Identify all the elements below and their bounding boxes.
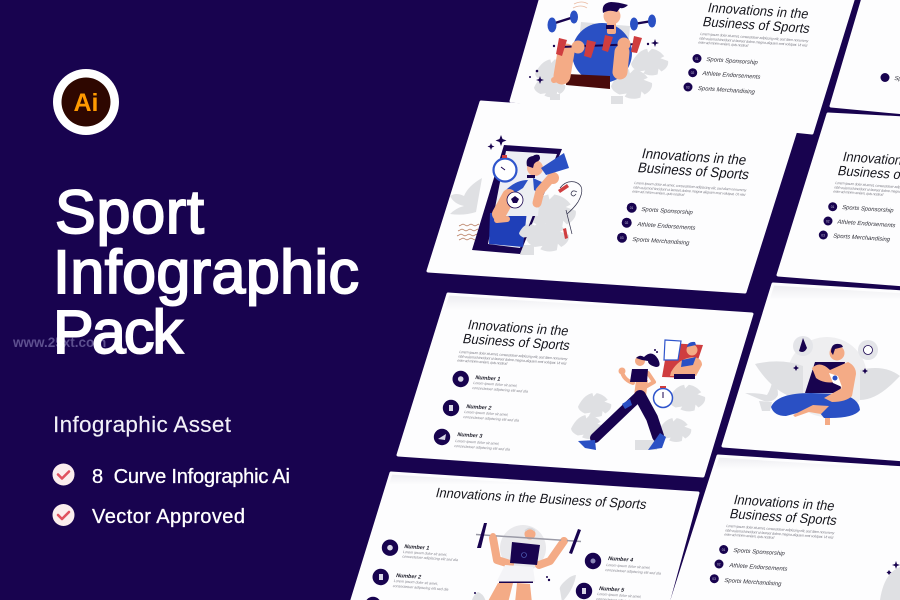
item: number 1: consectetuer adipiscing elit sed dia [472,386,529,394]
heading [728,492,839,528]
list: 01 [630,206,633,210]
body text: nibh euismod tincidunt ut laoreet dolore magna aliquam erat volutpat. Ut wisi [725,529,834,540]
item: number 5: Number 5 [598,586,625,594]
body text: enim ad minim veniam, quis nostrud [724,533,775,540]
item: number 4: consectetuer adipiscing elit sed dia [605,568,662,576]
illustration: running woman [571,340,705,450]
body text: enim ad minim veniam, quis nostrud [457,359,508,366]
heading: Innovations in the [466,317,570,339]
body text: enim ad minim veniam, quis nostrud [698,41,749,48]
list: Athlete Endorsements [728,563,788,573]
heading [836,149,900,185]
body text: enim ad minim veniam, quis nostrud [632,190,685,197]
body text: nibh euismod tincidunt ut laoreet dolore magna aliquam erat volutpat. Ut wisi [699,37,808,48]
list: Sports Merchandising [697,86,756,96]
list [819,202,896,243]
list: Sports Merchandising [631,237,690,247]
list: Sports Merchandising [832,234,891,243]
list: Athlete Endorsements [636,222,696,232]
list: Athlete Endorsements [836,220,896,229]
item: number 1: consectetuer adipiscing elit sed dia [402,555,459,562]
panel: slide 6 seated man [723,284,900,460]
list: 03 [712,577,716,581]
title [53,178,359,366]
panel: left promo column [12,69,359,528]
list [617,203,696,247]
item: number 5 [576,583,653,600]
illustration: man with dumbbells [529,2,668,104]
item: number 1 [382,540,459,562]
item: number 2 [443,400,520,423]
list [710,545,788,588]
panel: slide 2 phone and megaphone [428,102,798,292]
list: 01 [722,548,725,552]
icon: Adobe Illustrator badge: Ai [74,89,98,117]
list [684,54,761,96]
list: Sports Sponsorship [841,205,895,214]
item: number 2: Lorem ipsum dolor sit amet, [464,410,509,417]
item: number 3 [365,597,381,600]
item: number 3: Lorem ipsum dolor sit amet, [455,439,500,446]
body text [724,524,835,540]
heading: Business of Sports [701,14,812,36]
heading [461,317,572,353]
illustration: coach in phone [450,135,582,255]
heading [636,145,751,182]
body text: Lorem ipsum dolor sit amet, consectetuer adipiscing elit, sed diam nonummy [700,32,809,43]
panel: slide 4 barbell lifter [351,473,698,600]
illustration: barbell lifter [472,523,581,600]
item: number 1: Number 1 [474,375,501,383]
item: number 2: consectetuer adipiscing elit sed dia [392,584,450,592]
body text [698,32,809,48]
item: number 2: Number 2 [395,573,422,581]
illustration: corner leaf [880,561,900,600]
heading: Innovations in the [732,492,836,514]
panel: top right slide [831,0,900,113]
watermark: www.25xt.com [12,335,106,350]
list: 02 [717,562,721,566]
list: 03 [620,236,624,240]
list: 03 [821,234,825,238]
body text [833,181,900,197]
icon: Adobe Illustrator badge [53,69,119,135]
panel: slide 7 bottom right [671,456,900,600]
list: 01 [695,57,699,61]
item: number 4: Number 4 [607,556,635,564]
list: 01 [831,205,834,209]
illustration: man with arm band [745,336,900,425]
body text: Lorem ipsum dolor sit amet, consectetuer adipiscing elit, sed diam nonummy [634,181,747,192]
list: Sports Sponsorship [640,207,694,216]
item: number 3 [434,429,511,452]
panel: slide 5 right text [778,114,900,285]
body text: Lorem ipsum dolor sit amet, consectetuer adipiscing elit, sed diam nonummy [726,524,835,535]
title: Pack [53,298,184,366]
heading [701,0,812,36]
feature: vector approved: Vector Approved [92,506,245,528]
item: number 1: Lorem ipsum dolor sit amet, [402,550,448,557]
list: 02 [691,71,694,75]
panel: slide 3 runner [398,294,752,476]
subtitle: Infographic Asset [53,412,232,437]
item: number 4 [585,553,662,576]
body text: enim ad minim veniam, quis nostrud [833,190,884,197]
heading: Business of Sports [728,506,839,528]
list: 02 [826,220,830,224]
panel: slide 1 weightlifting dumbbells [511,0,854,133]
list: 03 [686,86,690,90]
heading: Innovations in the [640,145,749,168]
item: number 3: Number 3 [456,432,483,440]
body text [457,350,568,366]
item: number 2: Lorem ipsum dolor sit amet, [393,579,439,586]
item: number 5: Lorem ipsum dolor sit amet, [597,592,642,599]
item: number 1 [452,371,529,394]
item: number 2: Number 2 [465,404,492,412]
item: number 4: Lorem ipsum dolor sit amet, [606,563,651,570]
body text: nibh euismod tincidunt ut laoreet dolore magna aliquam erat volutpat. Ut wisi [633,186,746,197]
list: 02 [625,221,628,225]
item: number 1: Number 1 [403,544,430,552]
feature: curve infographic: 8 Curve Infographic Ai [92,466,290,488]
body text: nibh euismod tincidunt ut laoreet dolore magna aliquam erat volutpat. Ut wisi [458,355,567,366]
title: Sport [55,178,204,246]
list: Athlete Endorsements [701,71,761,81]
list: Sports Sponsorship [705,57,759,66]
heading: Business of Sports [636,159,751,182]
list: Sports Merchandising [723,578,782,588]
item: number 3: consectetuer adipiscing elit sed dia [454,444,511,452]
item: number 1: Lorem ipsum dolor sit amet, [473,381,518,388]
heading: Innovations in the Business of Sports [434,485,649,512]
title: Infographic [53,238,359,306]
item: number 2 [372,569,450,592]
body text: Lorem ipsum dolor sit amet, consectetuer adipiscing elit, sed diam nonummy [459,350,568,361]
heading: Innovations in the [706,0,810,22]
heading: Business of Sports [461,331,572,353]
item: number 2: consectetuer adipiscing elit sed dia [463,415,520,423]
list: Sports Sponsorship [732,548,786,557]
